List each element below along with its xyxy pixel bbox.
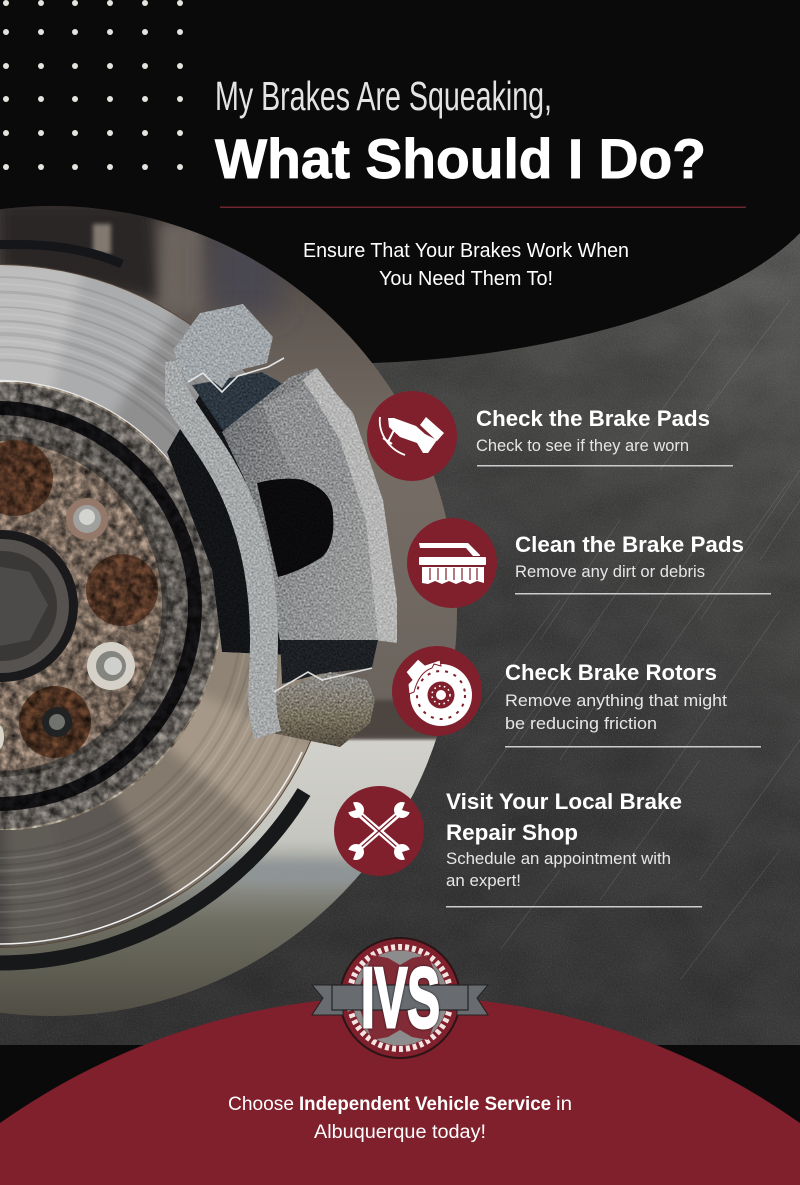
title: What Should I Do? bbox=[215, 127, 706, 190]
step 4 bbox=[334, 786, 702, 908]
title: My Brakes Are Squeaking, bbox=[215, 73, 552, 119]
dot grid decoration bbox=[3, 0, 183, 170]
rust lobes bbox=[0, 440, 53, 516]
IVS logo: IVS bbox=[361, 951, 440, 1046]
main pad body bbox=[222, 368, 397, 645]
heading: Clean the Brake Pads bbox=[515, 532, 744, 557]
subtitle: Ensure That Your Brakes Work When bbox=[303, 240, 629, 262]
heading: Visit Your Local Brake bbox=[446, 789, 682, 814]
rotor hat and hub flange bbox=[0, 382, 221, 830]
step 1 bbox=[367, 391, 733, 481]
textured steel background panel bbox=[0, 200, 800, 1045]
description: Check to see if they are worn bbox=[476, 437, 689, 455]
icon: brake rotor bbox=[392, 646, 482, 736]
backing plate arc bbox=[0, 792, 304, 963]
title bbox=[215, 73, 706, 190]
lower pad shadow bbox=[280, 640, 378, 684]
footer text: Albuquerque today! bbox=[314, 1122, 486, 1143]
step 2 bbox=[407, 518, 771, 608]
heading: Check the Brake Pads bbox=[476, 406, 710, 431]
icon: hand checking brake pad bbox=[367, 391, 457, 481]
photo backdrop bbox=[0, 200, 460, 1020]
IVS logo bbox=[312, 937, 488, 1059]
brake photo circle bbox=[0, 200, 460, 1020]
centre boss bbox=[0, 530, 78, 682]
icon: crossed wrenches bbox=[334, 786, 424, 876]
dark hose behind rotor bbox=[0, 244, 122, 264]
description: Remove anything that might bbox=[505, 692, 727, 710]
step 4: Repair Shop bbox=[446, 820, 578, 845]
lower bracket block bbox=[273, 672, 375, 747]
footer text: Choose bbox=[228, 1094, 294, 1115]
footer text: Independent Vehicle Service bbox=[299, 1094, 551, 1115]
description: Remove any dirt or debris bbox=[515, 563, 705, 581]
upper bracket block bbox=[173, 304, 273, 388]
lug studs bbox=[66, 498, 108, 540]
dark interior behind caliper bbox=[167, 396, 281, 654]
black top shape with curved edge bbox=[0, 0, 800, 363]
brake rotor disc bbox=[0, 264, 326, 948]
pad spring clips bbox=[188, 358, 284, 392]
icon: scrub brush bbox=[407, 518, 497, 608]
step 4: an expert! bbox=[446, 872, 521, 890]
step 3 bbox=[392, 646, 761, 748]
footer text: in bbox=[556, 1094, 572, 1115]
black footer band bbox=[0, 1045, 800, 1185]
red footer dome bbox=[0, 996, 800, 1185]
description: Schedule an appointment with bbox=[446, 850, 671, 868]
footer text bbox=[228, 1094, 572, 1143]
caliper dark opening bbox=[257, 479, 333, 577]
subtitle bbox=[303, 240, 629, 290]
bracket arm bbox=[165, 362, 268, 735]
step 3: be reducing friction bbox=[505, 715, 657, 733]
heading: Check Brake Rotors bbox=[505, 660, 717, 685]
subtitle: You Need Them To! bbox=[379, 268, 553, 290]
brake caliper bbox=[165, 304, 397, 747]
